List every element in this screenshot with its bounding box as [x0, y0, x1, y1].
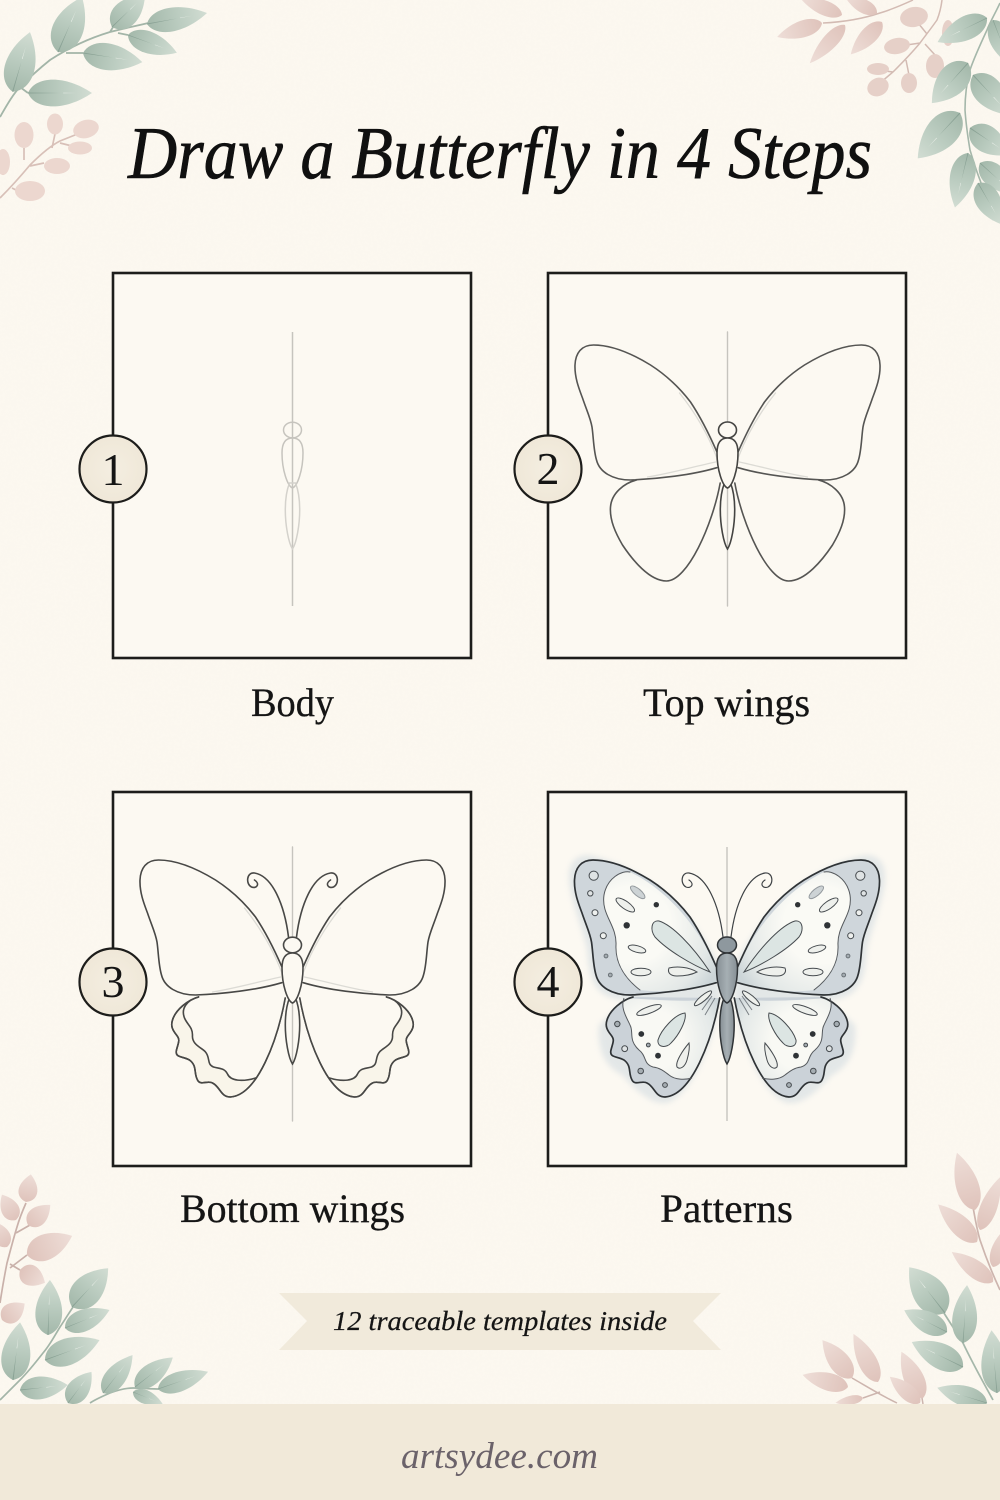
title: Draw a Butterfly in 4 Steps: [127, 113, 872, 195]
panel: step 3 bottom wings: [80, 792, 471, 1166]
step number 3: 3: [102, 956, 124, 1007]
label: Patterns: Patterns: [660, 1186, 793, 1231]
sketch: butterfly with scalloped wings and antennae: [140, 847, 445, 1121]
foliage: bottom left corner: [0, 1173, 211, 1410]
ribbon callout: 12 traceable templates inside: [333, 1306, 667, 1336]
step number 3: [80, 948, 146, 1016]
step number 1: [80, 436, 146, 502]
panel: step 1 body: [80, 273, 471, 658]
illustration: finished watercolor butterfly: [569, 847, 885, 1121]
foliage: top right corner: [775, 0, 1000, 231]
foliage: top left corner: [0, 0, 209, 201]
panel: step 2 top wings: [514, 273, 906, 658]
label: Bottom wings: Bottom wings: [180, 1186, 405, 1231]
step number 4: 4: [536, 956, 560, 1007]
ribbon callout: [279, 1293, 721, 1350]
step number 4: [514, 948, 582, 1016]
step number 2: 2: [536, 443, 560, 494]
foliage: bottom right corner: [800, 1149, 1000, 1413]
step number 2: [514, 436, 582, 502]
footer band: [0, 1404, 1000, 1500]
panel: step 4 patterns: [514, 792, 906, 1166]
sketch: pencil body outline: [282, 332, 303, 606]
step number 1: 1: [102, 444, 124, 495]
footer band: artsydee.com: [401, 1436, 598, 1477]
label: Top wings: Top wings: [643, 680, 810, 725]
sketch: body with top and bottom wing outlines: [575, 332, 880, 606]
label: Body: Body: [251, 680, 334, 725]
